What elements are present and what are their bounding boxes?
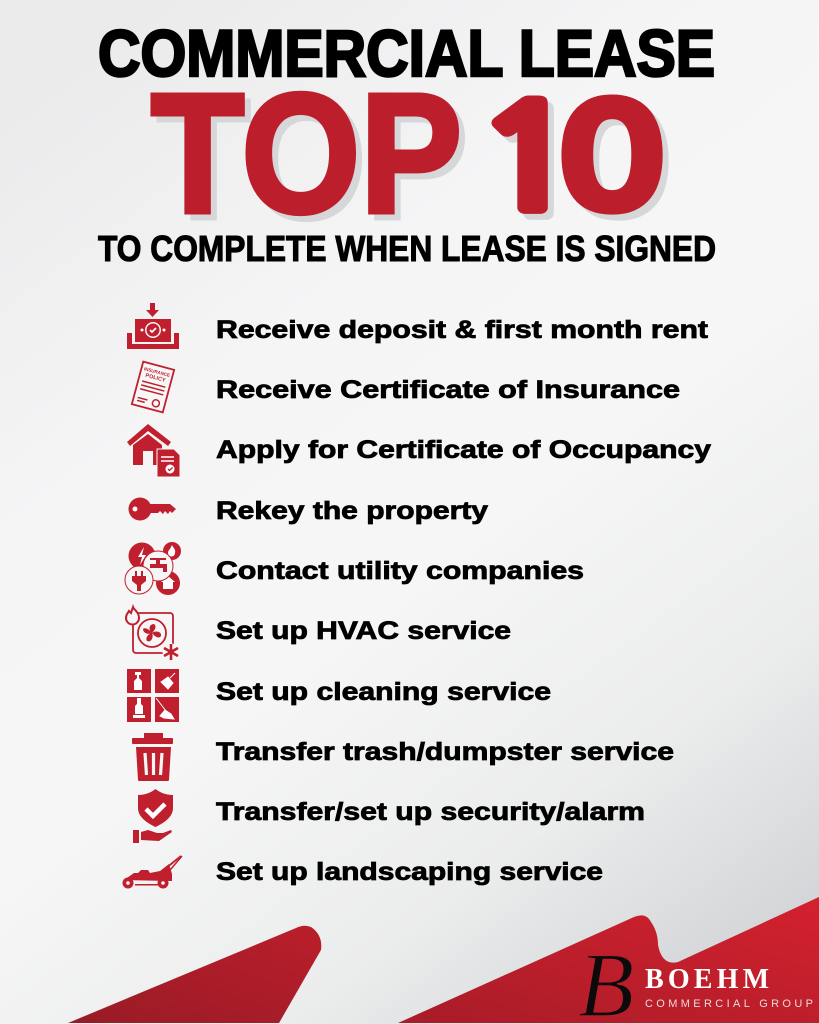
icon: insurance policy document <box>132 362 174 412</box>
heading: top 10 <box>151 59 672 255</box>
icon: insurance policy document: POLICY <box>145 373 166 384</box>
item 3 text: Apply for Certificate of Occupancy <box>216 436 711 464</box>
heading face <box>151 59 666 249</box>
footer shape: right red wedge <box>398 897 819 1023</box>
item 9 text: Transfer/set up security/alarm <box>216 798 645 826</box>
item 10 text: Set up landscaping service <box>216 858 603 886</box>
logo: Boehm Commercial Group <box>578 934 813 1024</box>
checklist text <box>216 316 711 886</box>
heading shadow: 10 <box>480 95 672 237</box>
icon: insurance policy document: INSURANCE <box>143 366 171 378</box>
item 1 text: Receive deposit & first month rent <box>216 316 709 344</box>
heading shadow: TOP <box>157 65 468 255</box>
icon: deposit money tray <box>127 303 179 349</box>
item 6 text: Set up HVAC service <box>216 617 511 645</box>
item 7 text: Set up cleaning service <box>216 678 551 706</box>
footer shape: left red wedge <box>68 926 321 1023</box>
icon: utilities circles <box>125 542 181 595</box>
item 8 text: Transfer trash/dumpster service <box>216 738 674 766</box>
item 2 text: Receive Certificate of Insurance <box>216 376 680 404</box>
item 5 text: Contact utility companies <box>216 557 584 585</box>
icon: hvac fan <box>126 607 180 660</box>
title: commercial lease: COMMERCIAL LEASE <box>98 16 715 90</box>
icon: shield and hand <box>133 789 173 843</box>
icon: cleaning squares <box>127 669 179 722</box>
heading face: 10 <box>474 89 666 231</box>
item 4 text: Rekey the property <box>216 497 488 525</box>
heading face: TOP <box>151 59 462 249</box>
icon: lawn mower <box>122 856 182 888</box>
logo: Boehm Commercial Group: BOEHM <box>645 964 769 995</box>
heading shadow <box>157 65 672 255</box>
subtitle: TO COMPLETE WHEN LEASE IS SIGNED <box>98 228 716 269</box>
icon: house with document <box>127 424 180 477</box>
icon: trash can <box>132 733 173 781</box>
logo: Boehm Commercial Group: COMMERCIAL GROUP <box>645 998 813 1010</box>
icon: key <box>128 498 176 520</box>
